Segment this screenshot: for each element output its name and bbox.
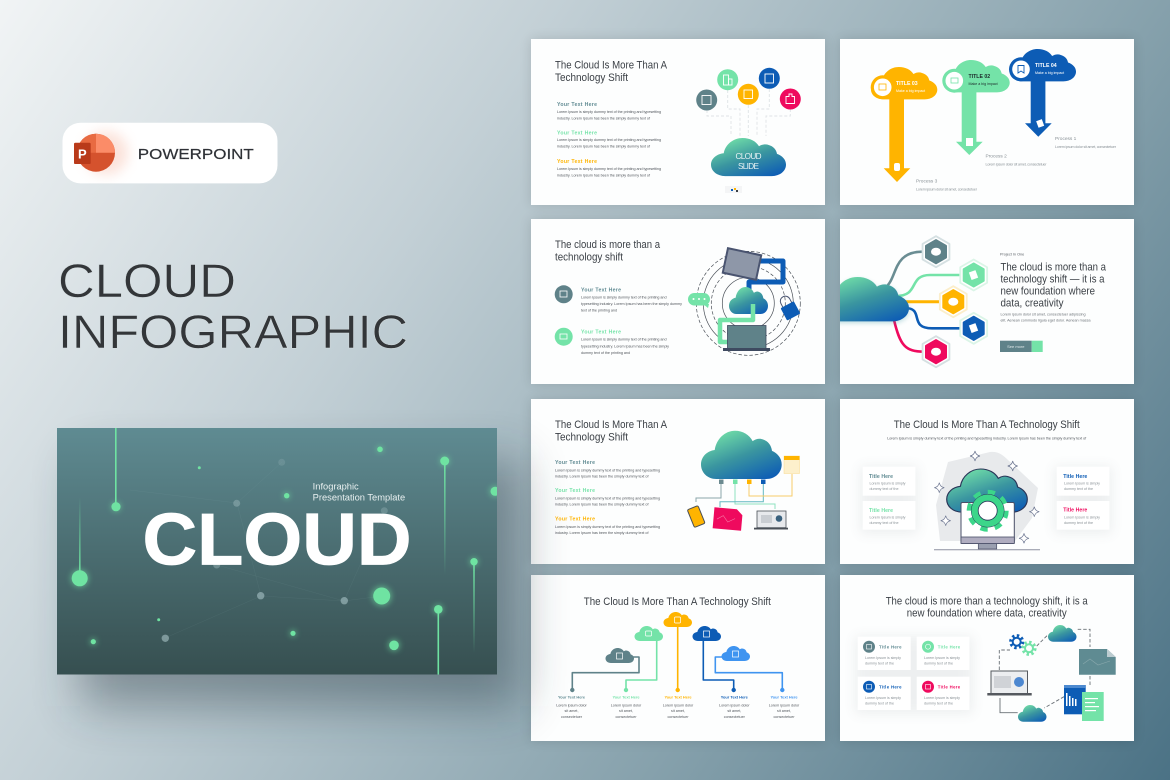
network lines xyxy=(170,556,369,636)
text block: slide 4: The cloud is more than a xyxy=(1000,262,1106,274)
cloud: slide 4 xyxy=(840,276,912,326)
text block: slide 5 items: Lorem Ipsum is simply dummy text of the printing and typesetting xyxy=(555,468,660,472)
icon: padlock xyxy=(776,293,800,321)
text block: slide 7 labels: Lorem ipsum dolor xyxy=(556,704,588,708)
icon: tablet xyxy=(723,248,761,280)
text block: slide 5 items: industry. Lorem Ipsum has been the simply dummy text of xyxy=(555,502,649,506)
dots: slide 7 xyxy=(570,688,784,692)
text block: slide 3 items: text of the printing and xyxy=(581,308,617,312)
cards: slide 8: Lorem Ipsum is simply xyxy=(924,656,960,660)
arrow: blue title 04 xyxy=(1009,49,1076,137)
text block: slide 7 labels: consectetuer xyxy=(724,715,746,719)
cloud: CLOUD SLIDE: CLOUD xyxy=(736,152,762,161)
text block: slide 3 items: Your Text Here xyxy=(581,288,621,294)
monitor xyxy=(934,502,1040,550)
text block: slide 7 labels: sit amet, xyxy=(671,709,685,713)
icon: powerpoint logo: P xyxy=(78,146,87,162)
cards: slide 6: Lorem Ipsum is simply xyxy=(870,482,906,486)
text block: slide 5 items xyxy=(555,460,660,535)
glowing dots xyxy=(71,446,500,651)
text block: slide 7 labels: consectetuer xyxy=(561,715,583,719)
arrow: blue title 04: TITLE 04 xyxy=(1035,63,1057,69)
text block: slide 4 xyxy=(1000,252,1106,322)
cards: slide 8: dummy text of the xyxy=(924,702,953,706)
heading: slide 1: The Cloud Is More Than A xyxy=(555,60,668,72)
icon: center cloud xyxy=(729,287,768,314)
icon: laptop xyxy=(987,671,1032,696)
blob backdrop xyxy=(936,452,1038,541)
cards: slide 6: dummy text of the xyxy=(870,487,898,491)
text block: slide 7 labels: Your Text Here xyxy=(770,694,798,700)
text block: slide 7 labels: sit amet, xyxy=(777,709,791,713)
text block: slide 7 labels: Lorem ipsum dolor xyxy=(719,704,750,708)
text block: process labels: Process 1 xyxy=(1055,136,1077,142)
icon: phone xyxy=(687,506,705,527)
hero subtitle xyxy=(313,482,405,502)
main title: CLOUD xyxy=(58,254,236,307)
text block: slide 5 items: Lorem Ipsum is simply dummy text of the printing and typesetting xyxy=(555,525,660,529)
hero panel: cloud cover slide xyxy=(57,428,500,675)
heading: slide 1 xyxy=(555,60,668,84)
panel: slide 8 data flow xyxy=(840,575,1134,741)
text block: slide 7 labels: sit amet, xyxy=(565,709,578,713)
icon: bar chart document xyxy=(1064,685,1104,721)
cards: slide 8: dummy text of the xyxy=(924,662,953,666)
text block: slide 1 items: Your Text Here xyxy=(557,130,597,136)
icon: document xyxy=(1079,649,1116,675)
text block: slide 1 items xyxy=(557,102,661,178)
cards: slide 8: Title Here xyxy=(938,645,961,650)
icon: calendar xyxy=(784,456,800,474)
heading: slide 8: The cloud is more than a technology shift, it is a xyxy=(886,596,1088,608)
text block: slide 3 items xyxy=(555,285,682,355)
cloud: CLOUD SLIDE xyxy=(711,138,786,176)
text block: slide 7 labels: Lorem ipsum dolor xyxy=(663,704,694,708)
icon: gear xyxy=(970,493,1006,529)
icon: pink document xyxy=(713,507,743,531)
text block: process labels: Lorem ipsum dolor sit amet, consectetuer xyxy=(916,188,978,192)
glowing lines xyxy=(79,428,475,675)
text block: slide 1 items: Your Text Here xyxy=(557,159,597,165)
panel: slide 7 five clouds xyxy=(531,575,825,741)
text block: slide 1 items: Lorem Ipsum is simply dummy text of the printing and typesetting xyxy=(557,138,661,142)
text block: slide 4: technology shift — it is a xyxy=(1000,274,1105,286)
text block: slide 7 labels: consectetuer xyxy=(773,715,795,719)
text block: slide 1 items: Your Text Here xyxy=(557,102,597,108)
cards: slide 6: Lorem Ipsum is simply xyxy=(1064,516,1100,520)
cards: slide 8: dummy text of the xyxy=(865,662,894,666)
subheading: slide 6: Lorem Ipsum is simply dummy text of the printing and typesetting industry. Lorem Ipsum has been the simply dummy text of xyxy=(887,436,1087,440)
text block: slide 3 items: Your Text Here xyxy=(581,330,621,336)
cards: slide 6: dummy text of the xyxy=(870,521,898,525)
text block: slide 3 items: typesetting industry. Lorem Ipsum has been the simply dummy xyxy=(581,302,682,306)
heading: slide 6: The Cloud Is More Than A Technology Shift xyxy=(894,419,1080,431)
hero title: CLOUD xyxy=(142,500,412,580)
hero shadow xyxy=(80,460,520,706)
cards: slide 8: dummy text of the xyxy=(865,702,894,706)
cards: slide 6: Title Here xyxy=(1063,474,1087,480)
text block: slide 5 items: Lorem Ipsum is simply dummy text of the printing and typesetting xyxy=(555,496,660,500)
text block: slide 7 labels: Your Text Here xyxy=(558,694,586,700)
text block: slide 3 items: Lorem Ipsum is simply dummy text of the printing and xyxy=(581,296,666,300)
text block: slide 5 items: Your Text Here xyxy=(555,516,595,522)
button: see more xyxy=(1000,341,1043,352)
cards: slide 8: Title Here xyxy=(879,645,902,650)
text block: slide 7 labels: consectetuer xyxy=(667,715,689,719)
cards: slide 6: dummy text of the xyxy=(1064,487,1093,491)
text block: slide 5 items: industry. Lorem Ipsum has been the simply dummy text of xyxy=(555,531,649,535)
cloud outlined xyxy=(947,469,1027,512)
text block: slide 7 labels: Your Text Here xyxy=(664,694,692,700)
icon circles: slide 1 xyxy=(696,68,801,110)
small logo xyxy=(725,186,742,193)
hexagons: slide 4 xyxy=(923,236,987,367)
clouds: slide 8 xyxy=(1018,625,1076,722)
text block: slide 3 items: dummy text of the printing and xyxy=(581,351,630,355)
heading: slide 8: new foundation where data, creativity xyxy=(907,608,1067,620)
heading: slide 7: The Cloud Is More Than A Technology Shift xyxy=(584,596,771,608)
sparkles xyxy=(934,451,1039,543)
heading: slide 3 xyxy=(555,239,660,264)
cloud: slide 5 xyxy=(701,431,782,479)
arrow: yellow title 03: TITLE 03 xyxy=(896,81,918,87)
text block: slide 4: data, creativity xyxy=(1000,297,1064,309)
text block: slide 7 labels: sit amet, xyxy=(619,709,633,713)
cloud: CLOUD SLIDE: SLIDE xyxy=(738,162,760,171)
text block: slide 1 items: industry. Lorem Ipsum has been the simply dummy text of xyxy=(557,116,651,120)
text block: slide 5 items: industry. Lorem Ipsum has been the simply dummy text of xyxy=(555,474,649,478)
text block: process labels xyxy=(916,136,1117,192)
cards: slide 8: Lorem Ipsum is simply xyxy=(924,696,960,700)
text block: slide 1 items: Lorem Ipsum is simply dummy text of the printing and typesetting xyxy=(557,167,661,171)
dashed connectors: slide 1 xyxy=(707,89,790,136)
connectors: slide 8 xyxy=(999,629,1090,713)
icon: chat bubble xyxy=(688,293,710,308)
panel: slide 3 cloud devices xyxy=(531,219,825,384)
heading: slide 3: The cloud is more than a xyxy=(555,239,660,251)
connectors: slide 4 xyxy=(885,252,962,352)
diagram: concentric rings xyxy=(696,251,800,355)
text block: slide 7 labels: consectetuer xyxy=(615,715,637,719)
arrow: yellow title 03: Make a big impact xyxy=(896,89,925,93)
cards: slide 6: dummy text of the xyxy=(1064,521,1093,525)
connectors: slide 7 xyxy=(572,625,782,690)
text block: slide 4: Project In One xyxy=(1000,252,1024,256)
text block: slide 5 items: Your Text Here xyxy=(555,488,595,494)
clouds: slide 7 xyxy=(606,612,750,663)
cards: slide 6: Title Here xyxy=(869,474,893,480)
powerpoint badge xyxy=(62,123,278,183)
arrow: green title 02 xyxy=(942,60,1010,155)
text block: slide 5 items: Your Text Here xyxy=(555,460,595,466)
panel: slide 2 cloud arrows xyxy=(840,39,1134,205)
main title: INFOGRAPHIC xyxy=(58,305,408,358)
text block: slide 1 items: industry. Lorem Ipsum has been the simply dummy text of xyxy=(557,144,651,148)
text block: slide 7 labels: Lorem ipsum dolor xyxy=(611,704,642,708)
ports: slide 5 xyxy=(719,480,766,484)
text block: process labels: Lorem ipsum dolor sit amet, consectetuer xyxy=(1055,145,1117,149)
arrow: yellow title 03 xyxy=(871,67,937,182)
text block: slide 3 items: typesetting industry. Lorem Ipsum has been the simply xyxy=(581,344,669,348)
icon: gears xyxy=(1011,636,1035,654)
arrow: green title 02: TITLE 02 xyxy=(968,74,990,80)
text block: process labels: Lorem ipsum dolor sit amet, consectetuer xyxy=(986,162,1047,166)
panel: slide 4 hexagons xyxy=(820,219,1134,384)
text block: slide 7 labels: Your Text Here xyxy=(612,694,640,700)
cards: slide 6: Lorem Ipsum is simply xyxy=(1064,482,1100,486)
panel: slide 6 gear cloud xyxy=(840,399,1134,564)
panel: slide 5 cloud with devices xyxy=(531,399,825,564)
network nodes xyxy=(162,459,388,642)
icon: laptop xyxy=(723,326,770,351)
connectors: slide 5 xyxy=(696,474,792,509)
text block: slide 7 labels: Lorem ipsum dolor xyxy=(769,704,800,708)
hero subtitle: Infographic xyxy=(313,482,359,492)
cards: slide 8: Lorem Ipsum is simply xyxy=(865,696,901,700)
hero subtitle: Presentation Template xyxy=(313,492,405,502)
arrow: green title 02: Make a big impact xyxy=(968,82,998,86)
cards: slide 8 xyxy=(855,636,973,714)
panel: slide 1 cloud services xyxy=(531,39,825,205)
text block: slide 4: Lorem ipsum dolor sit amet, consectetuer adipiscing xyxy=(1000,312,1086,316)
text block: slide 3 items: Lorem Ipsum is simply dummy text of the printing and xyxy=(581,338,666,342)
text block: process labels: Process 2 xyxy=(986,154,1007,160)
text block: slide 7 labels: Your Text Here xyxy=(721,694,749,700)
cards: slide 6: Title Here xyxy=(1063,508,1087,514)
heading: slide 5: Technology Shift xyxy=(555,432,628,444)
cards: slide 6: Title Here xyxy=(869,508,893,514)
heading: slide 5: The Cloud Is More Than A xyxy=(555,419,668,431)
cards: slide 6 xyxy=(860,466,1112,534)
text block: process labels: Process 3 xyxy=(916,178,938,184)
icon: blue pipe xyxy=(749,261,783,298)
text block: slide 7 labels xyxy=(556,694,800,719)
cards: slide 8: Lorem Ipsum is simply xyxy=(865,656,901,660)
text block: slide 4: new foundation where xyxy=(1000,285,1095,297)
heading: slide 8 xyxy=(886,596,1088,620)
text block: slide 7 labels: sit amet, xyxy=(727,709,741,713)
heading: slide 3: technology shift xyxy=(555,252,623,264)
text block: slide 4: elit. Aenean commodo ligula eget dolor. Aenean massa xyxy=(1000,318,1091,322)
text: POWERPOINT: POWERPOINT xyxy=(138,147,254,163)
cards: slide 6: Lorem Ipsum is simply xyxy=(870,516,906,520)
arrow: blue title 04: Make a big impact xyxy=(1035,71,1064,75)
text block: slide 1 items: Lorem Ipsum is simply dummy text of the printing and typesetting xyxy=(557,110,661,114)
icon: green pipe xyxy=(720,304,753,342)
heading: slide 1: Technology Shift xyxy=(555,72,628,84)
icon: powerpoint logo xyxy=(74,131,128,175)
icon: laptop xyxy=(754,511,788,530)
main title xyxy=(58,254,408,358)
cards: slide 8: Title Here xyxy=(938,685,961,690)
cards: slide 8: Title Here xyxy=(879,685,902,690)
text block: slide 1 items: industry. Lorem Ipsum has been the simply dummy text of xyxy=(557,174,651,178)
heading: slide 5 xyxy=(555,419,668,444)
button: see more: See more xyxy=(1007,344,1025,349)
